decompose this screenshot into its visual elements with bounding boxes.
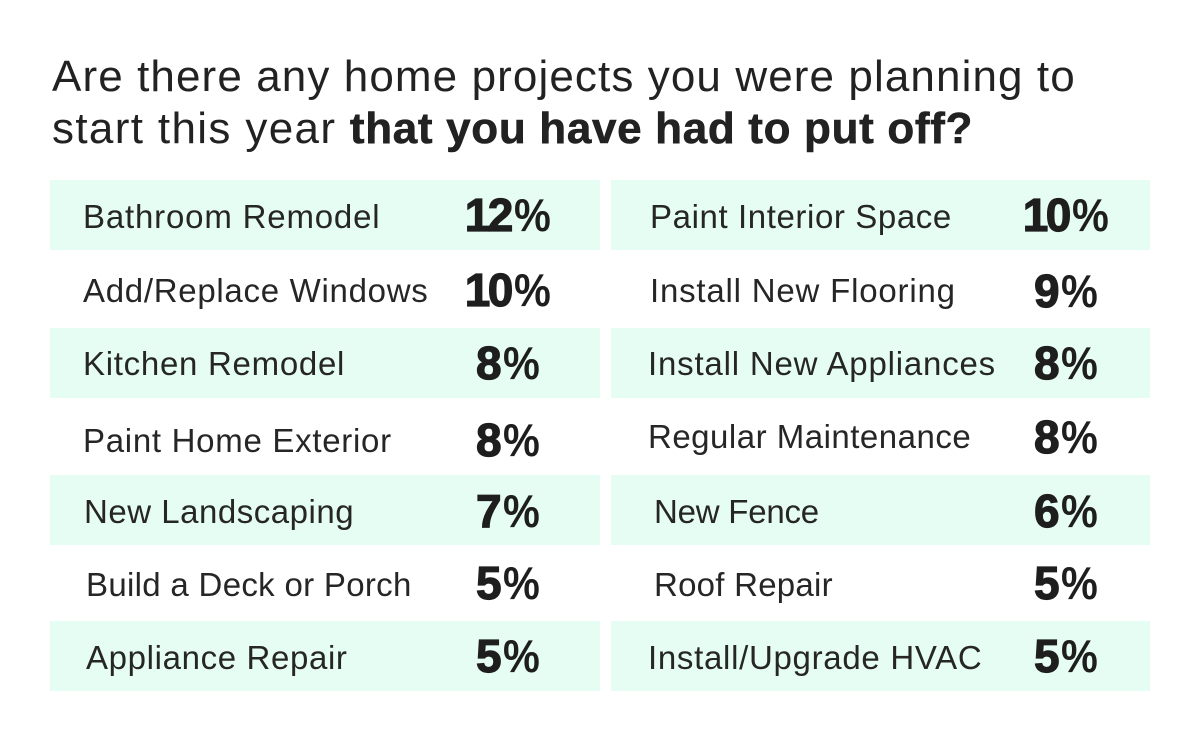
title: Are there any home projects you were planning to <box>52 52 1076 101</box>
value: 9%: % <box>1061 265 1098 317</box>
value: 5% <box>1034 557 1098 609</box>
value: 8%: % <box>1061 337 1098 389</box>
value: 5%: 5 <box>476 557 502 609</box>
row band: Install/Upgrade HVAC <box>611 621 1150 691</box>
label: Appliance Repair: Appliance Repair <box>86 639 348 676</box>
label: New Fence: New Fence <box>654 493 819 530</box>
value: 5%: % <box>1061 630 1098 682</box>
value: 10% <box>465 264 551 316</box>
value: 8% <box>1034 337 1098 389</box>
value: 10% <box>1023 189 1109 241</box>
value: 6%: 6 <box>1034 485 1060 537</box>
value: 7% <box>476 485 540 537</box>
value: 12%: 12 <box>465 189 511 241</box>
row band: New Fence <box>611 475 1150 545</box>
row band: Paint Interior Space <box>611 180 1150 250</box>
label: Bathroom Remodel: Bathroom Remodel <box>83 198 380 235</box>
value: 12% <box>465 189 551 241</box>
value: 10%: 10 <box>465 264 511 316</box>
value: 6% <box>1034 485 1098 537</box>
label: Install New Flooring: Install New Flooring <box>650 272 956 309</box>
row band: Bathroom Remodel <box>50 180 600 250</box>
value: 9%: 9 <box>1034 265 1060 317</box>
value: 5%: % <box>1061 557 1098 609</box>
row band: Kitchen Remodel <box>50 328 600 398</box>
value: 5%: % <box>503 630 540 682</box>
value: 9% <box>1034 265 1098 317</box>
label: Paint Interior Space: Paint Interior Space <box>650 198 952 235</box>
value: 5%: % <box>503 557 540 609</box>
value: 10%: % <box>514 264 551 316</box>
value: 5%: 5 <box>1034 557 1060 609</box>
value: 8%: % <box>1061 411 1098 463</box>
value: 12%: % <box>514 189 551 241</box>
value: 8%: 8 <box>1034 337 1060 389</box>
value: 6%: % <box>1061 485 1098 537</box>
panel: right column <box>611 180 1150 691</box>
value: 8%: 8 <box>476 414 502 466</box>
label: Roof Repair: Roof Repair <box>654 566 833 603</box>
label: New Landscaping: New Landscaping <box>84 493 354 530</box>
value: 8% <box>476 414 540 466</box>
label: Add/Replace Windows: Add/Replace Windows <box>83 272 428 309</box>
value: 8% <box>476 337 540 389</box>
label: Build a Deck or Porch: Build a Deck or Porch <box>86 566 412 603</box>
label: Regular Maintenance: Regular Maintenance <box>648 418 971 455</box>
value: 10%: 10 <box>1023 189 1069 241</box>
value: 5%: 5 <box>1034 630 1060 682</box>
label: Install/Upgrade HVAC: Install/Upgrade HVAC <box>648 639 982 676</box>
row band: New Landscaping <box>50 475 600 545</box>
value: 7%: % <box>503 485 540 537</box>
value: 5% <box>1034 630 1098 682</box>
panel: left column <box>50 180 600 691</box>
label: Kitchen Remodel: Kitchen Remodel <box>83 345 345 382</box>
row band: Install New Appliances <box>611 328 1150 398</box>
title <box>52 52 1076 153</box>
value: 8%: 8 <box>1034 411 1060 463</box>
value: 5% <box>476 557 540 609</box>
value: 8%: % <box>503 337 540 389</box>
title: start this year that you have had to put off? <box>52 104 973 153</box>
value: 5%: 5 <box>476 630 502 682</box>
value: 8%: % <box>503 414 540 466</box>
label: Paint Home Exterior: Paint Home Exterior <box>83 422 392 459</box>
value: 5% <box>476 630 540 682</box>
label: Install New Appliances: Install New Appliances <box>648 345 996 382</box>
value: 10%: % <box>1072 189 1109 241</box>
value: 8% <box>1034 411 1098 463</box>
value: 8%: 8 <box>476 337 502 389</box>
value: 7%: 7 <box>476 485 502 537</box>
row band: Appliance Repair <box>50 621 600 691</box>
